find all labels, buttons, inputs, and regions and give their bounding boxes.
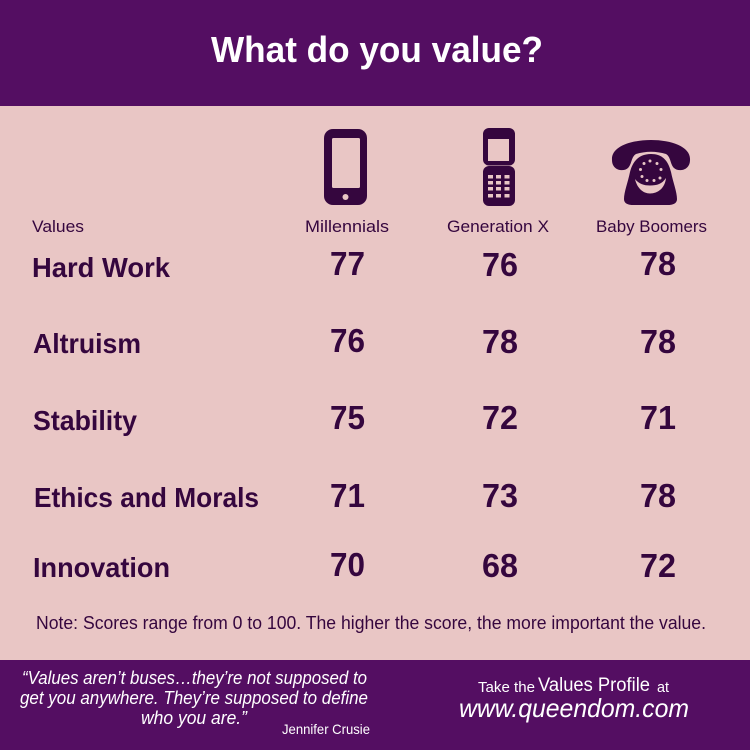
icon: flip phone	[483, 128, 515, 206]
row: Ethics and Morals: 78	[640, 478, 676, 515]
title: What do you value?	[211, 29, 543, 70]
call to action: at	[657, 679, 670, 696]
call to action: Take the	[478, 679, 535, 696]
column headings: Millennials	[305, 217, 389, 236]
row: Hard Work: 77	[330, 246, 365, 283]
row: Innovation: 68	[482, 548, 518, 585]
row: Hard Work	[32, 246, 676, 284]
row: Stability: 75	[330, 400, 365, 437]
quote	[20, 667, 368, 728]
quote: “Values aren’t buses…they’re not supposed to	[22, 667, 367, 688]
row: Stability: 71	[640, 400, 676, 437]
quote: get you anywhere. They’re supposed to define	[20, 687, 368, 708]
row: Altruism: Altruism	[33, 328, 141, 359]
row: Ethics and Morals: 73	[482, 478, 518, 515]
column headings: Generation X	[447, 217, 549, 236]
icon: rotary telephone	[612, 140, 690, 205]
row: Altruism	[33, 323, 676, 361]
row: Innovation: 72	[640, 548, 676, 585]
row: Stability: 72	[482, 400, 518, 437]
row: Ethics and Morals	[34, 478, 676, 515]
row: Altruism: 76	[330, 323, 365, 360]
call to action: Values Profile	[538, 675, 650, 696]
call to action	[478, 675, 670, 696]
row: Stability	[33, 400, 676, 437]
icon: smartphone	[324, 129, 367, 205]
row: Hard Work: 76	[482, 247, 518, 284]
column headings: Values	[32, 217, 84, 236]
row: Altruism: 78	[640, 324, 676, 361]
footer band	[0, 660, 750, 750]
row: Stability: Stability	[33, 405, 137, 436]
row: Hard Work: 78	[640, 246, 676, 283]
row: Innovation: Innovation	[33, 552, 170, 583]
column headings: Baby Boomers	[596, 217, 707, 236]
row: Innovation: 70	[330, 547, 365, 584]
quote attribution: Jennifer Crusie	[282, 721, 370, 737]
column headings	[32, 217, 707, 236]
note: Note: Scores range from 0 to 100. The higher the score, the more important the value.	[36, 613, 706, 633]
website: www.queendom.com	[459, 693, 689, 723]
header band	[0, 0, 750, 106]
row: Altruism: 78	[482, 324, 518, 361]
row: Ethics and Morals: Ethics and Morals	[34, 482, 259, 513]
row: Hard Work: Hard Work	[32, 252, 170, 283]
quote: who you are.”	[141, 707, 248, 728]
row: Ethics and Morals: 71	[330, 478, 365, 515]
row: Innovation	[33, 547, 676, 585]
